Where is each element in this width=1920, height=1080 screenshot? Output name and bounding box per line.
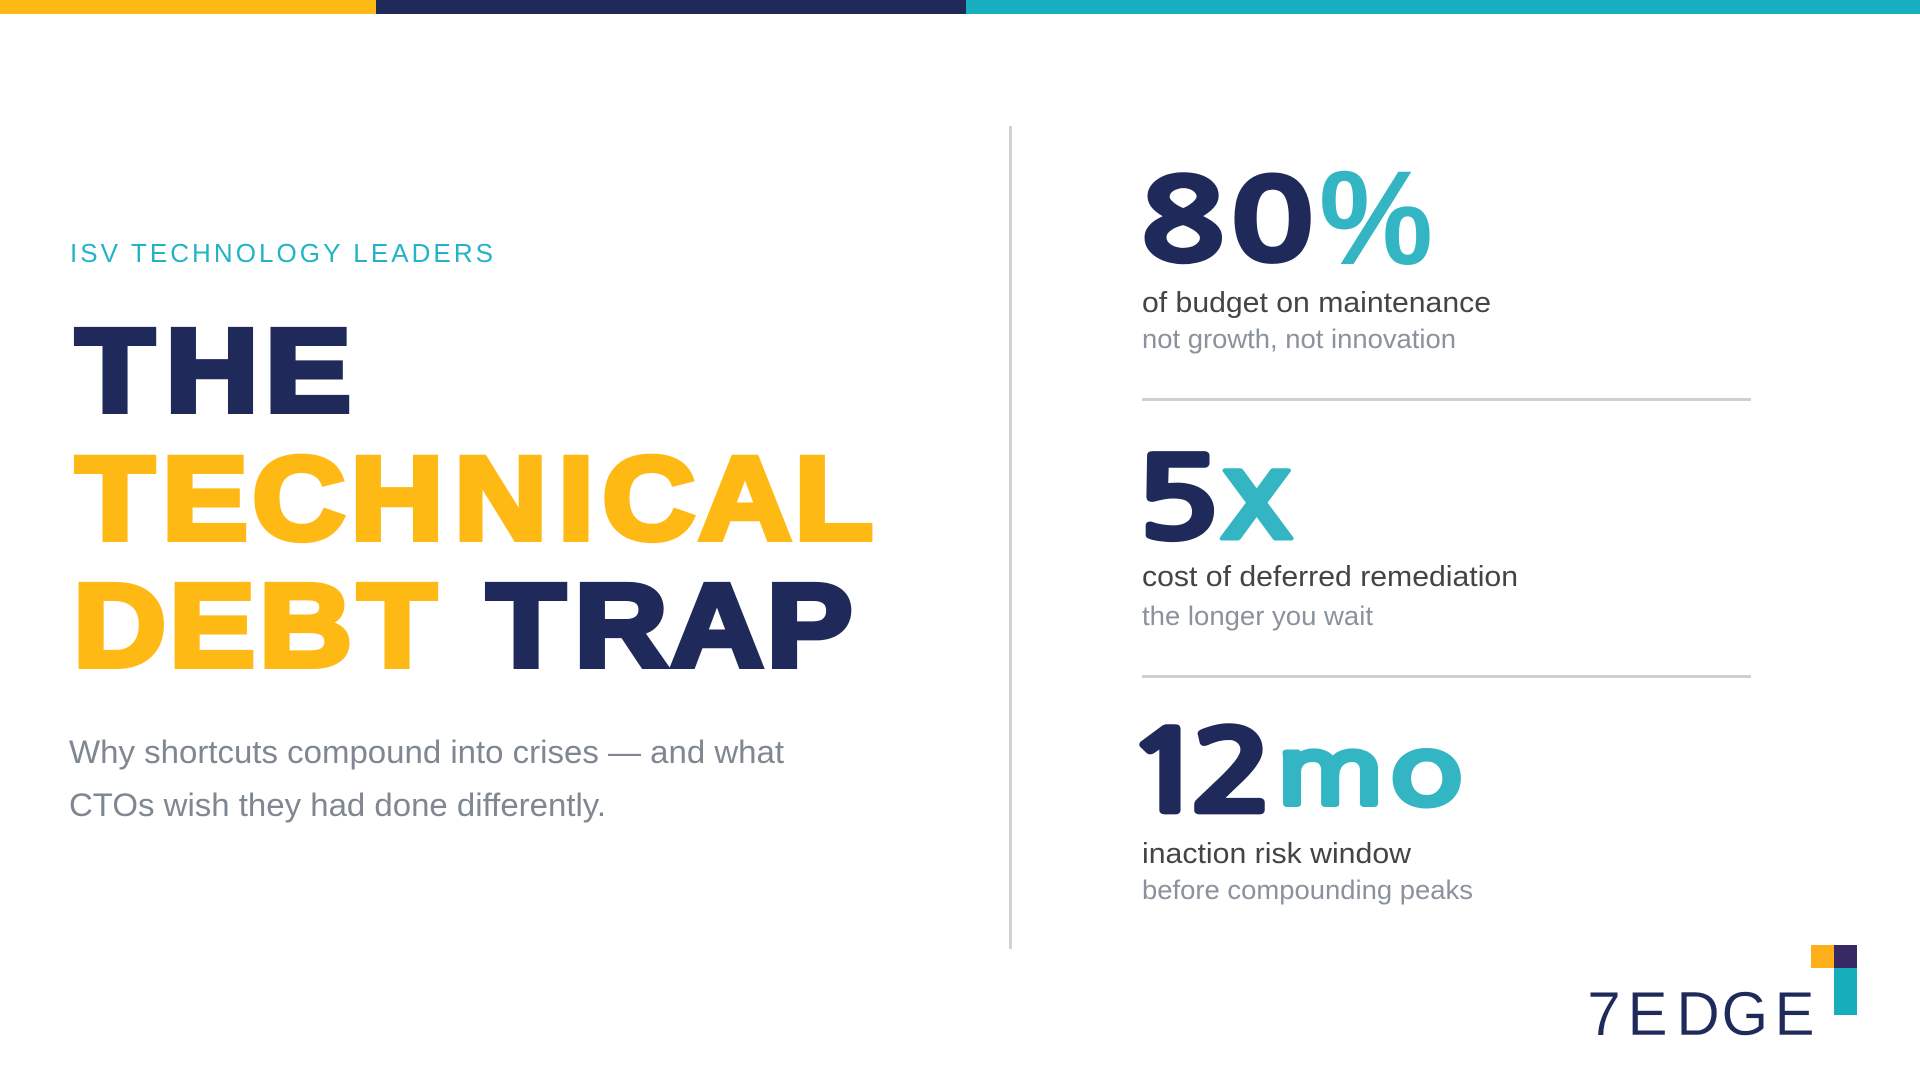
stat number: 5 — [1135, 444, 1220, 555]
stat number: x — [1220, 435, 1293, 559]
subtitle: Why shortcuts compound into crises — and what — [69, 734, 784, 770]
stat number — [1135, 435, 1293, 559]
stat note: before compounding peaks — [1142, 875, 1473, 905]
stat label: of budget on maintenance — [1142, 287, 1491, 319]
stat note: the longer you wait — [1142, 601, 1374, 631]
stat number: % — [1319, 144, 1433, 293]
title: TRAP — [487, 560, 852, 692]
vertical divider — [1009, 126, 1012, 949]
icon: logo squares — [1811, 945, 1857, 1015]
stat label: inaction risk window — [1142, 838, 1412, 870]
subtitle — [69, 734, 784, 823]
stat number: mo — [1275, 725, 1463, 820]
title — [73, 305, 873, 692]
stat number: 80 — [1140, 166, 1315, 277]
title: DEBT — [73, 560, 436, 692]
stat note: not growth, not innovation — [1142, 324, 1456, 354]
logo: 7EDGE — [1587, 945, 1857, 1048]
stat number: 12 — [1124, 717, 1274, 828]
title: TECHNICAL — [76, 433, 873, 565]
top colour bar — [0, 0, 1920, 14]
stat number — [1124, 717, 1463, 828]
title: THE — [76, 305, 351, 437]
panel: title block — [69, 238, 873, 823]
panel: stat 80% — [1140, 144, 1491, 354]
panel: stat 12mo — [1124, 717, 1473, 905]
panel: stat 5x — [1135, 435, 1518, 631]
stat number — [1140, 144, 1433, 293]
stat label: cost of deferred remediation — [1142, 561, 1518, 593]
subtitle: CTOs wish they had done differently. — [69, 787, 606, 823]
eyebrow label: ISV TECHNOLOGY LEADERS — [70, 238, 493, 268]
logo wordmark: 7EDGE — [1587, 979, 1815, 1048]
